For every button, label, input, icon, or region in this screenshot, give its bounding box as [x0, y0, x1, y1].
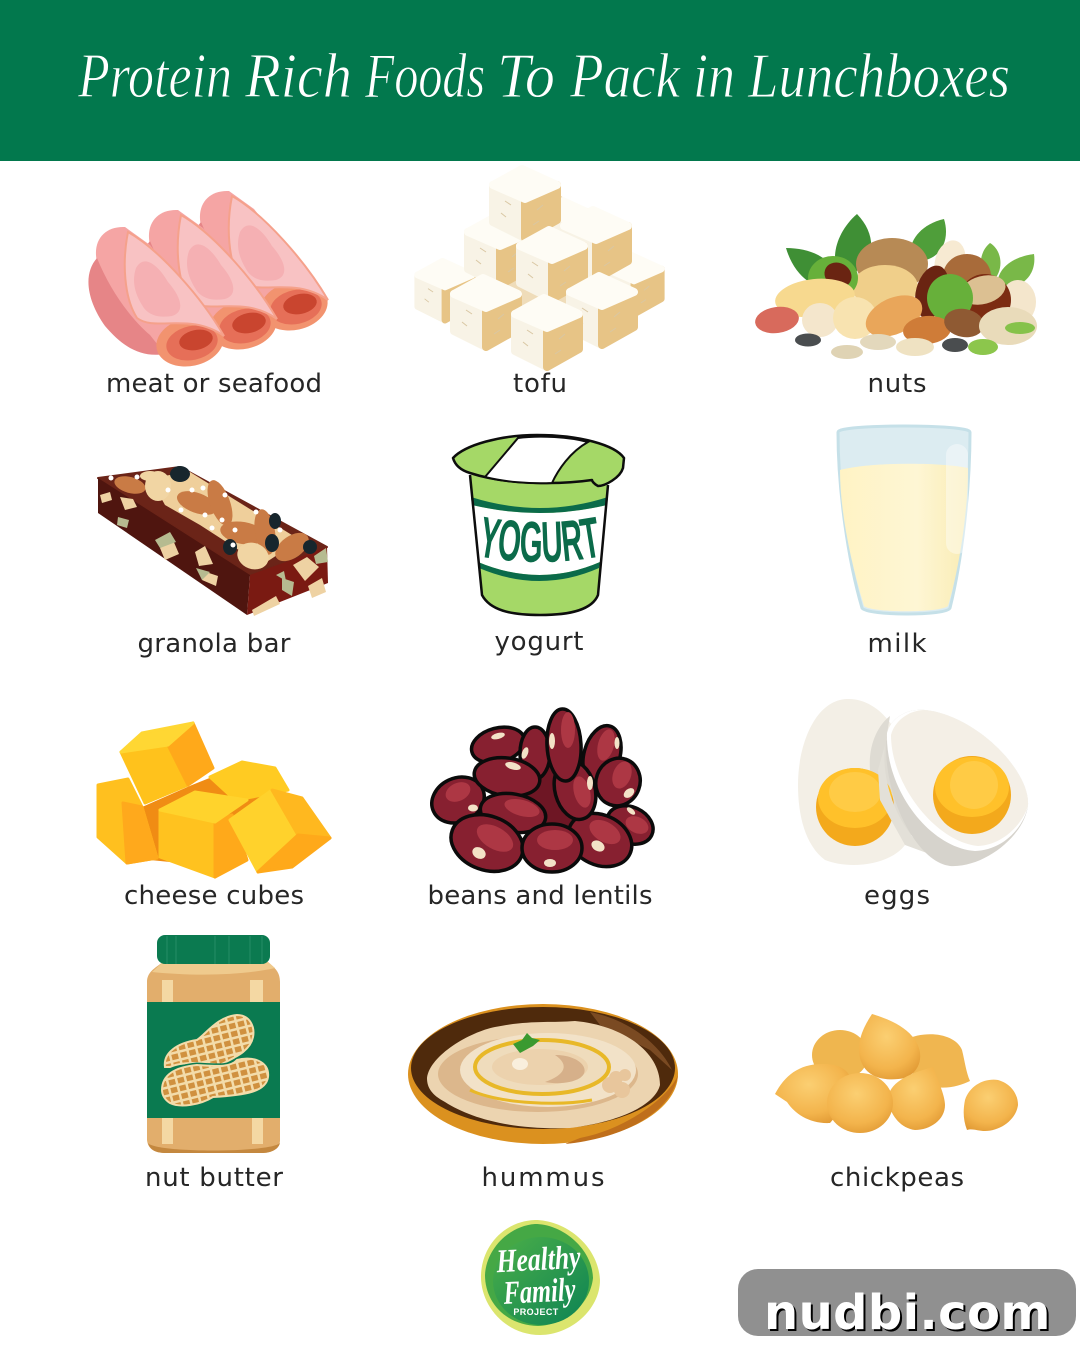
label: granola bar: granola bar — [138, 629, 291, 659]
food: chickpeas — [775, 1014, 1018, 1193]
title: Lunchboxes — [747, 40, 1010, 111]
title: Pack — [569, 40, 681, 111]
food: nut butter jar — [145, 935, 283, 1193]
label: beans and lentils: beans and lentils — [428, 881, 652, 911]
header banner — [0, 0, 1080, 161]
logo: Healthy Family Project — [481, 1220, 600, 1335]
title: To — [497, 40, 555, 111]
logo wordmark: Healthy — [495, 1240, 582, 1280]
food: tofu — [418, 169, 661, 399]
food: cheese cubes — [98, 723, 330, 911]
food: glass of milk — [838, 426, 970, 659]
watermark: nudbi.com — [738, 1269, 1076, 1336]
label: milk: milk — [868, 629, 926, 659]
label: chickpeas: chickpeas — [830, 1163, 964, 1193]
label: nut butter: nut butter — [145, 1163, 283, 1193]
logo wordmark — [495, 1240, 582, 1317]
food: hummus bowl — [408, 1004, 678, 1193]
logo wordmark: PROJECT — [513, 1307, 559, 1317]
peanut illustration — [162, 1015, 268, 1105]
food: meat or seafood — [88, 191, 332, 399]
yogurt brand text: YOGURT — [484, 516, 597, 562]
label: nuts: nuts — [868, 369, 926, 399]
label: eggs: eggs — [864, 881, 930, 911]
title: Rich — [244, 40, 352, 111]
title: in — [693, 40, 735, 111]
label: yogurt: yogurt — [494, 627, 584, 657]
title: Protein — [77, 40, 232, 111]
title: Foods — [364, 40, 485, 111]
logo wordmark: Family — [502, 1272, 577, 1312]
food: nuts — [753, 214, 1037, 399]
label: meat or seafood: meat or seafood — [106, 369, 322, 399]
food: granola bar — [98, 466, 328, 659]
label: cheese cubes: cheese cubes — [124, 881, 304, 911]
label: tofu: tofu — [513, 369, 567, 399]
label: hummus: hummus — [482, 1163, 604, 1193]
food: yogurt cup — [452, 434, 626, 657]
title — [77, 40, 1010, 111]
food: beans and lentils — [424, 708, 659, 881]
food: eggs — [798, 699, 1028, 911]
